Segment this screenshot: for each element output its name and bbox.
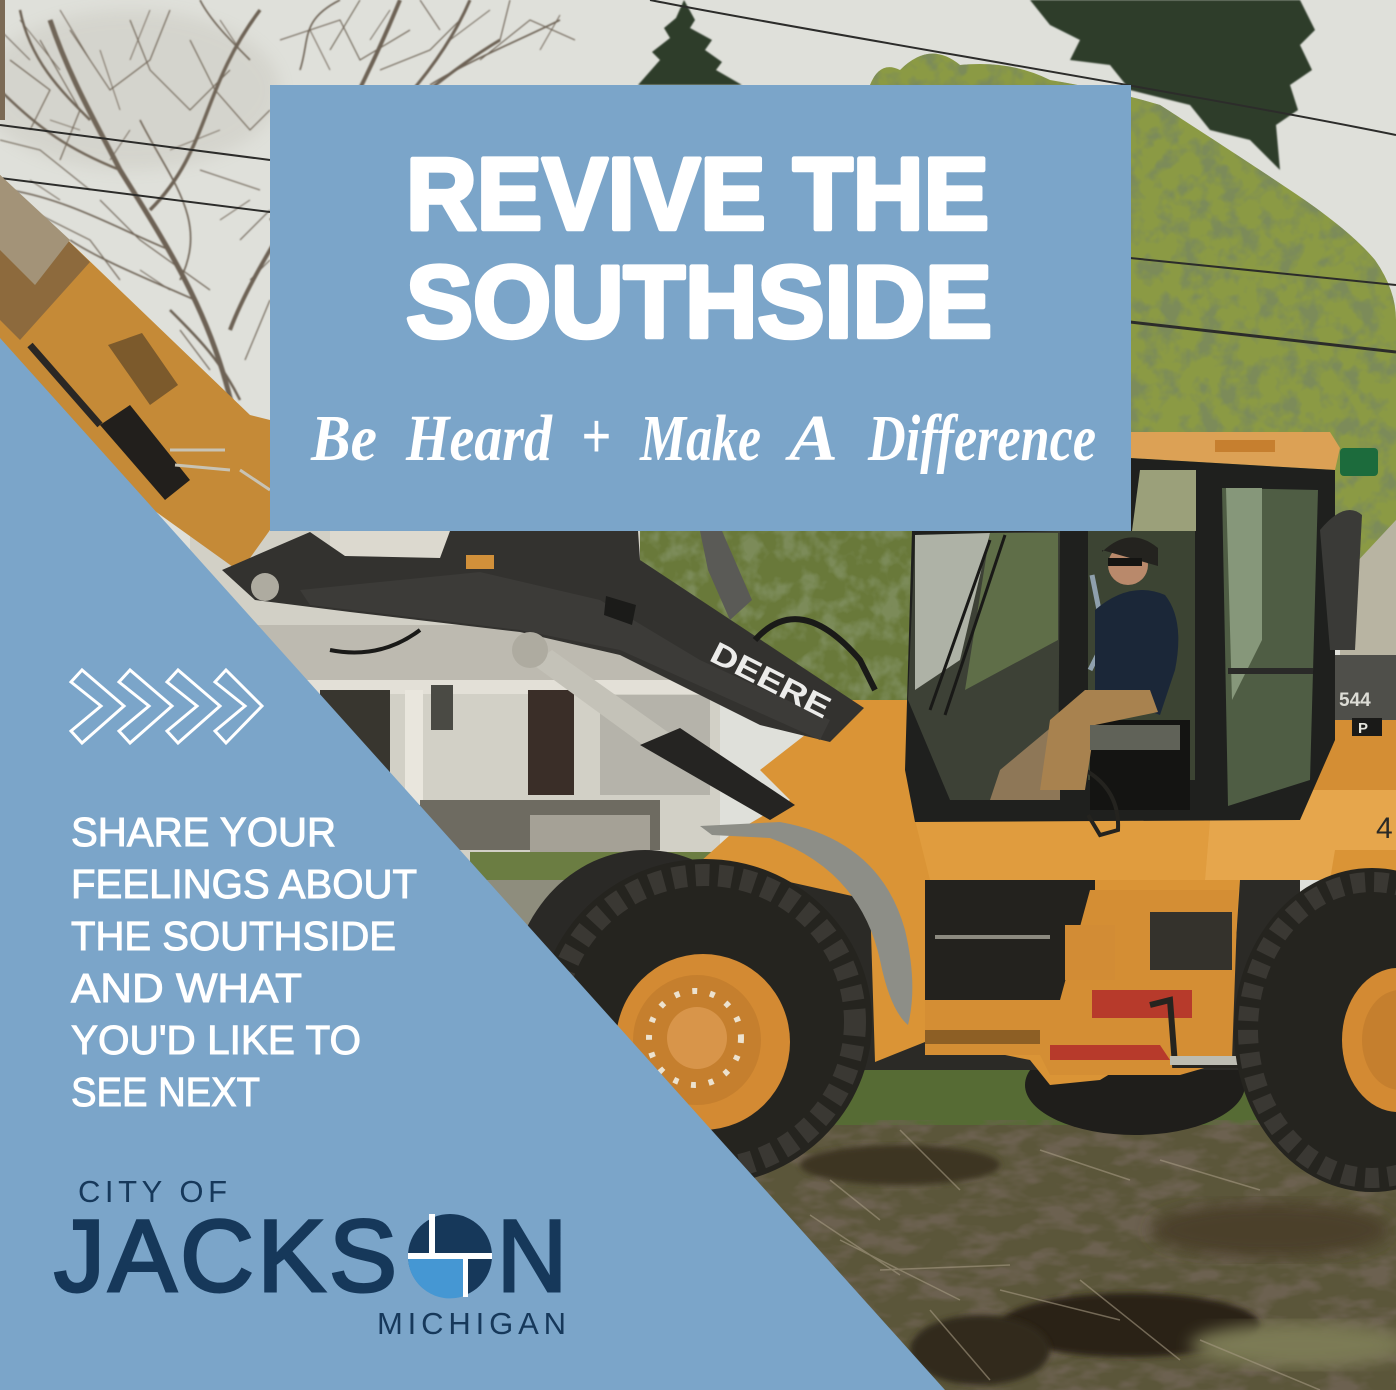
title bbox=[406, 137, 992, 359]
title panel bbox=[270, 85, 1131, 531]
logo: round O mark bbox=[408, 1214, 492, 1298]
script tagline: Difference bbox=[867, 402, 1096, 475]
photo: fender bbox=[700, 822, 912, 1025]
photo: cab labels: P bbox=[1358, 720, 1368, 737]
photo: far right house bbox=[1340, 520, 1396, 655]
photo: cab of the loader bbox=[905, 432, 1378, 835]
call-to-action text: THE SOUTHSIDE bbox=[71, 913, 396, 959]
title: REVIVE THE bbox=[406, 137, 989, 251]
logo: City of Jackson Michigan: JACKS bbox=[54, 1199, 397, 1313]
photo: ground and grass bbox=[400, 852, 1396, 1390]
call-to-action text: FEELINGS ABOUT bbox=[71, 861, 417, 907]
photo: driver in cab bbox=[1040, 537, 1180, 790]
logo: City of Jackson Michigan: CITY OF bbox=[78, 1174, 227, 1209]
icon: four chevron arrows bbox=[71, 670, 262, 743]
logo: City of Jackson Michigan: MICHIGAN bbox=[377, 1306, 566, 1341]
photo: cab labels: 4 bbox=[1376, 812, 1393, 845]
photo: loader rear tires bbox=[510, 850, 1245, 1150]
photo: loader chassis bbox=[700, 655, 1396, 1085]
photo: twigs on the soil bbox=[810, 1130, 1320, 1390]
call-to-action text: SHARE YOUR bbox=[71, 809, 336, 855]
photo: front tire with orange rim bbox=[538, 859, 872, 1185]
photo: bare tree at top left bbox=[0, 0, 575, 420]
photo: green trees behind the house bbox=[640, 531, 930, 701]
script tagline: Be bbox=[310, 402, 377, 475]
call-to-action text: YOU'D LIKE TO bbox=[71, 1017, 361, 1063]
photo: rear tire with orange rim bbox=[1234, 868, 1396, 1192]
photo: cab labels: 544 bbox=[1339, 690, 1371, 711]
photo: excavator bucket top left bbox=[0, 175, 270, 572]
script tagline: A bbox=[785, 402, 838, 475]
photo: cab labels bbox=[1339, 690, 1393, 845]
photo: utility wires bbox=[0, 0, 1396, 352]
DEERE label on arm: DEERE bbox=[705, 635, 837, 725]
diagonal blue panel bbox=[0, 338, 945, 1390]
script tagline: Heard bbox=[405, 402, 553, 475]
photo: green leafy tree at right bbox=[850, 30, 1396, 570]
script tagline: Make bbox=[639, 402, 761, 475]
call-to-action text bbox=[71, 809, 417, 1115]
photo: white house behind the arm bbox=[190, 531, 736, 861]
logo: City of Jackson Michigan: N bbox=[497, 1199, 567, 1313]
photo: dark pine trees bbox=[638, 0, 1315, 170]
script tagline: + bbox=[581, 400, 611, 473]
call-to-action text: SEE NEXT bbox=[71, 1069, 260, 1115]
photo: loader arm with DEERE branding bbox=[222, 531, 875, 820]
call-to-action text: AND WHAT bbox=[71, 965, 302, 1011]
script tagline bbox=[310, 400, 1096, 475]
logo: City of Jackson Michigan bbox=[54, 1174, 567, 1341]
title: SOUTHSIDE bbox=[406, 245, 992, 359]
